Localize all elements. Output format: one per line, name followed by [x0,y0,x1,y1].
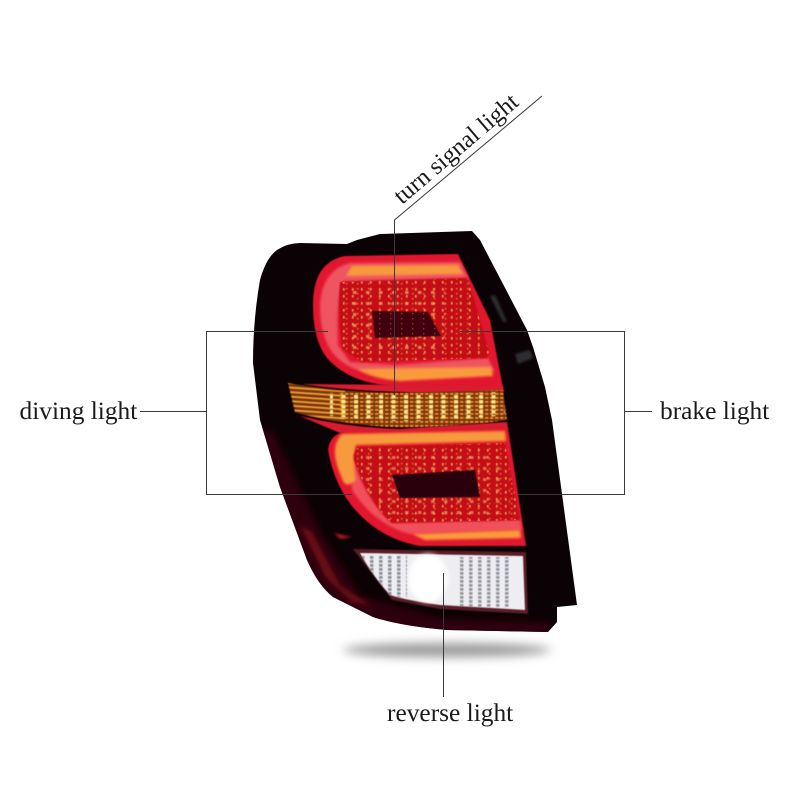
label: reverse light: reverse light [387,699,513,727]
turn signal band [288,383,508,433]
brake light lower [328,428,526,546]
lower housing red tint [258,430,550,640]
reverse lens texture [362,555,513,607]
tail lamp [253,231,577,640]
label: diving light: diving light [20,397,137,425]
upper amber glow bottom [358,367,493,381]
lower pale tube [350,445,522,534]
reverse hot spot [408,554,448,602]
upper LED dots [342,278,489,362]
reverse surround [353,549,528,614]
brake light bracket [460,332,652,494]
upper centre specks [372,311,441,338]
callout lines [140,96,652,697]
lower red tube [328,428,526,546]
lower LED dots [353,443,516,523]
upper red tube [313,254,503,388]
band stripes [330,392,505,421]
shadow under lamp [343,643,551,657]
lower LED panel [353,443,520,523]
diving light bracket [140,332,352,494]
label: brake light: brake light [660,397,769,425]
reverse light [353,549,528,614]
brake light upper [313,254,503,388]
band trim [302,384,504,393]
lower amber glow left [335,431,506,485]
reverse light leader [442,573,444,697]
band base [288,383,507,427]
upper LED panel [339,278,489,362]
reverse lens [360,553,525,610]
upper pale tube [320,262,495,378]
lower amber glow bottom [412,530,521,540]
band left scan lines [288,383,345,421]
upper amber glow [346,265,463,276]
side reflection [490,295,533,364]
lamp housing [253,231,577,632]
lower dark centre [392,470,480,498]
turn signal leader [394,96,542,395]
label: turn signal light: turn signal light [388,88,524,210]
band lower red trim [300,416,508,433]
upper dark centre [372,311,441,338]
band dots [340,390,507,427]
